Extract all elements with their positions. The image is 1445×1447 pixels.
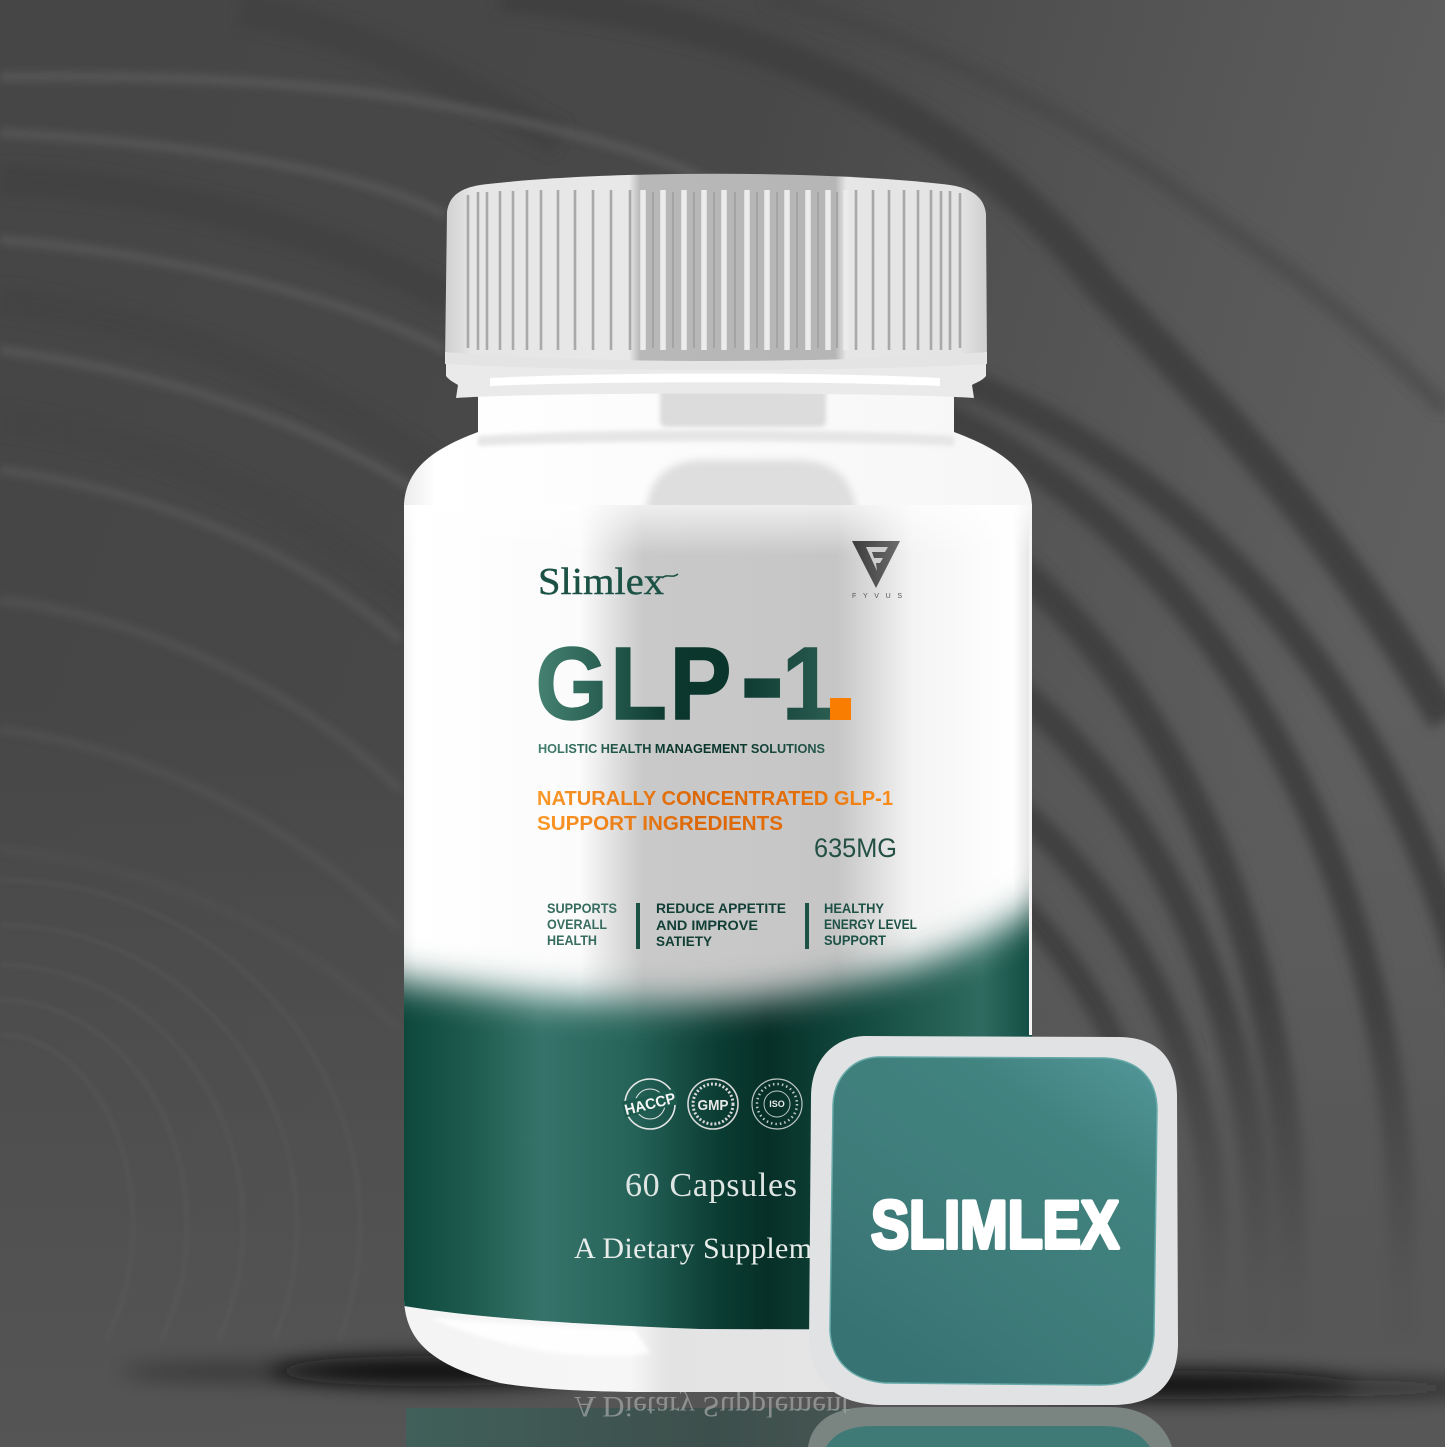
right edge highlight bbox=[1029, 510, 1032, 1035]
benefit: appetite and satiety bbox=[656, 900, 786, 949]
benefit divider bbox=[636, 903, 640, 949]
product title: G bbox=[536, 625, 608, 741]
reflected card face bbox=[826, 1426, 1150, 1447]
manufacturer logo: FYVUS bbox=[852, 541, 902, 600]
benefit: appetite and satiety: SATIETY bbox=[656, 933, 713, 949]
certification badges bbox=[622, 1079, 802, 1129]
benefit: overall health: HEALTH bbox=[547, 932, 597, 948]
badge: GMP bbox=[688, 1079, 738, 1129]
reflected bottle panel bbox=[406, 1408, 1018, 1447]
base gloss bbox=[449, 1322, 648, 1354]
badge: HACCP: HACCP bbox=[623, 1090, 677, 1119]
benefit: energy level: HEALTHY bbox=[824, 900, 885, 916]
reflected supplement text: A Dietary Supplement bbox=[574, 1390, 851, 1423]
bottle base bbox=[404, 1300, 834, 1392]
neck shade bbox=[478, 430, 954, 446]
bottle bbox=[404, 385, 1032, 1400]
cap lip bbox=[445, 352, 987, 370]
benefit: overall health bbox=[547, 900, 617, 948]
floor reflection bbox=[406, 1390, 1172, 1447]
card logotype: SLIMLEX bbox=[871, 1187, 1119, 1263]
brand wordmark: Slimlex bbox=[538, 561, 664, 603]
badge: ISO bbox=[752, 1079, 802, 1129]
lid card bbox=[809, 1036, 1178, 1405]
benefit: energy level: SUPPORT bbox=[824, 932, 886, 948]
product type: A Dietary Supplement bbox=[574, 1232, 851, 1265]
lower fade of the ripple bands bbox=[1030, 1000, 1445, 1447]
card teal face bbox=[830, 1057, 1157, 1385]
neck highlight bbox=[658, 394, 827, 428]
product title: - bbox=[740, 592, 785, 760]
green band bbox=[404, 889, 1032, 1330]
product title: L bbox=[610, 625, 667, 741]
cap shell bbox=[445, 174, 987, 368]
shoulder highlight bbox=[644, 458, 857, 505]
ingredient claim: SUPPORT INGREDIENTS bbox=[537, 813, 783, 835]
benefit: overall health: OVERALL bbox=[547, 916, 607, 932]
card white frame bbox=[809, 1036, 1178, 1405]
cap bbox=[445, 174, 987, 398]
second benefit divider bbox=[805, 903, 809, 949]
white label field bbox=[404, 505, 1032, 1065]
cap neck ring bbox=[446, 358, 986, 398]
tagline: HOLISTIC HEALTH MANAGEMENT SOLUTIONS bbox=[538, 741, 825, 756]
bottle body bbox=[404, 385, 1032, 1400]
badge: GMP: GMP bbox=[698, 1097, 728, 1114]
capsule count: 60 Capsules bbox=[625, 1167, 797, 1204]
orange full stop bbox=[830, 698, 851, 720]
benefits row bbox=[547, 900, 917, 949]
neck and shoulder bbox=[404, 394, 1032, 505]
neck ring shine bbox=[490, 374, 940, 386]
ingredient claim bbox=[537, 788, 893, 835]
ingredient claim: NATURALLY CONCENTRATED GLP-1 bbox=[537, 788, 893, 810]
logo triangle bbox=[852, 541, 900, 588]
logo letter cutout bbox=[866, 547, 888, 571]
badge: ISO: ISO bbox=[769, 1099, 785, 1109]
cap center rib shade bbox=[653, 192, 837, 348]
logo caption: FYVUS bbox=[852, 593, 902, 600]
product title: 1 bbox=[782, 625, 834, 741]
product title: P bbox=[670, 625, 731, 741]
benefit: appetite and satiety: REDUCE APPETITE bbox=[656, 900, 786, 916]
product title bbox=[536, 592, 851, 760]
badge: HACCP bbox=[622, 1079, 678, 1129]
floor shadow bbox=[120, 1356, 1445, 1399]
cap side ribs bbox=[468, 190, 960, 350]
cap center ribs bbox=[643, 190, 846, 350]
label top fade bbox=[590, 505, 1032, 544]
benefit: energy level: ENERGY LEVEL bbox=[824, 916, 917, 932]
benefit: energy level bbox=[824, 900, 917, 948]
reflected card bbox=[808, 1407, 1172, 1447]
benefit: overall health: SUPPORTS bbox=[547, 900, 617, 916]
benefit: appetite and satiety: AND IMPROVE bbox=[656, 917, 758, 933]
dosage: 635MG bbox=[814, 833, 897, 863]
